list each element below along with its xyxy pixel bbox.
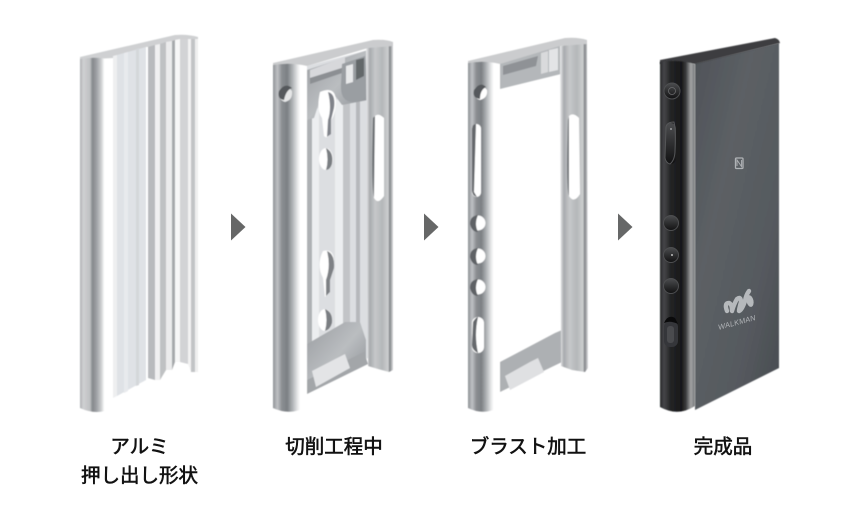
power button <box>664 83 680 99</box>
Walkman wordmark: WALKMAN <box>717 313 757 332</box>
rail slot <box>569 114 580 200</box>
playback buttons <box>664 216 678 294</box>
right rail <box>366 44 393 372</box>
round tube <box>273 64 307 412</box>
arrow 2 <box>424 214 438 240</box>
label: extrusion: アルミ <box>110 436 169 458</box>
label: extrusion <box>81 436 198 487</box>
middle plate with keyholes <box>307 50 368 392</box>
label: extrusion: 押し出し形状 <box>81 465 198 487</box>
top rim <box>468 38 587 65</box>
lower keyhole <box>320 250 334 297</box>
extrusion ribs <box>113 39 198 398</box>
panel: extruded aluminium profile <box>80 35 198 412</box>
top edge <box>660 38 780 64</box>
lower hole <box>318 309 332 331</box>
rail slot <box>374 115 384 201</box>
arrow 3 <box>618 214 632 240</box>
arrow 1 <box>231 214 246 240</box>
bottom bar <box>500 330 562 392</box>
panel: finished Walkman <box>660 38 780 412</box>
top rim <box>273 40 393 67</box>
label: finished product: 完成品 <box>694 436 752 458</box>
tube port <box>279 86 292 102</box>
panel: blasted frame <box>468 38 588 412</box>
label: machining: 切削工程中 <box>285 436 383 458</box>
volume rocker <box>665 122 676 164</box>
upper hole <box>319 148 333 170</box>
right rail <box>560 43 588 372</box>
top bar <box>500 44 561 89</box>
NFC mark <box>736 158 743 168</box>
round tube <box>80 58 113 412</box>
side body <box>660 61 695 412</box>
back panel <box>695 43 779 410</box>
round tube <box>468 62 500 412</box>
tube holes and slots <box>470 85 487 353</box>
upper pocket <box>307 50 368 120</box>
panel: machining stage <box>273 40 393 412</box>
label: blasting: ブラスト加工 <box>470 436 586 458</box>
top edge of extrusion <box>80 35 198 60</box>
hold switch <box>664 317 678 347</box>
top keyhole <box>318 90 336 137</box>
Walkman logo <box>717 291 757 332</box>
lower pocket <box>307 322 368 394</box>
